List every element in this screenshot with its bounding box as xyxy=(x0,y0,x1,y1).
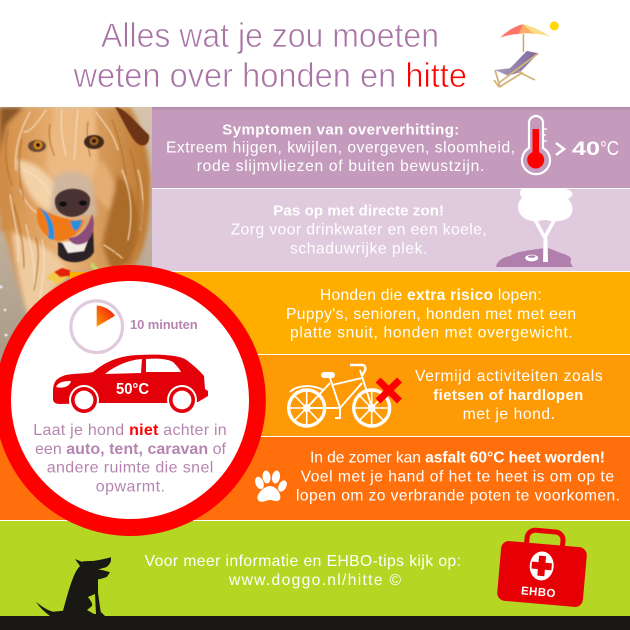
sun warning text xyxy=(231,203,487,257)
panel: direct sun xyxy=(152,189,630,271)
temperature above 40 degrees: 40 xyxy=(572,139,600,160)
collar xyxy=(46,268,70,284)
avoid activities text: fietsen of hardlopen xyxy=(433,387,583,404)
avoid activities text: Vermijd activiteiten zoals xyxy=(415,368,603,385)
temperature above 40 degrees xyxy=(556,138,619,160)
panel: footer xyxy=(0,521,630,630)
ten minutes label: 10 minuten xyxy=(130,317,198,332)
right ear xyxy=(115,107,149,145)
warning text xyxy=(33,422,227,496)
title xyxy=(73,17,467,95)
icon: car: 50°C xyxy=(116,381,149,398)
warning text: opwarmt. xyxy=(96,479,165,496)
icon: paw print xyxy=(254,470,289,502)
asphalt text: lopen om zo verbrande poten te voorkomen. xyxy=(296,488,620,505)
warning text: Laat je hond niet achter in xyxy=(33,422,227,439)
icon: first aid kit xyxy=(497,527,589,608)
footer text: Voor meer informatie en EHBO-tips kijk op: xyxy=(145,553,461,570)
mouth xyxy=(58,228,94,262)
symptoms text: Symptomen van oververhitting: xyxy=(222,121,459,138)
warning text: andere ruimte die snel xyxy=(47,460,213,477)
panel: avoid activities xyxy=(0,355,630,436)
icon: bicycle with red cross xyxy=(289,365,400,426)
panel: hot asphalt xyxy=(0,437,630,520)
icon: tree with water bowl xyxy=(496,189,573,267)
nose xyxy=(55,189,90,217)
avoid activities text: met je hond. xyxy=(463,406,555,423)
fur strands xyxy=(6,110,143,298)
panel: symptoms xyxy=(152,107,630,188)
eyes xyxy=(28,140,46,152)
photo: golden retriever with ball xyxy=(0,107,152,363)
temperature above 40 degrees: °C xyxy=(600,138,619,160)
callout: never leave dog behind xyxy=(0,265,266,536)
icon: car xyxy=(53,355,208,415)
title: Alles wat je zou moeten xyxy=(101,17,439,55)
icon: first aid kit: EHBO xyxy=(520,585,556,600)
title: weten over honden en hitte xyxy=(73,57,467,95)
asphalt text: In de zomer kan asfalt 60°C heet worden! xyxy=(310,450,605,467)
icon: beach chair with parasol and sun xyxy=(494,22,559,87)
avoid activities text xyxy=(415,368,603,423)
icon: dog silhouette xyxy=(36,557,111,616)
extra risk text: platte snuit, honden met overgewicht. xyxy=(290,325,573,342)
panel: extra risk xyxy=(0,272,630,354)
symptoms text: Extreem hijgen, kwijlen, overgeven, sloomheid, xyxy=(166,140,515,157)
extra risk text: Honden die extra risico lopen: xyxy=(320,287,542,304)
extra risk text xyxy=(286,287,576,342)
footer text: www.doggo.nl/hitte © xyxy=(228,572,402,589)
sun warning text: schaduwrijke plek. xyxy=(290,240,427,257)
sun warning text: Zorg voor drinkwater en een koele, xyxy=(231,221,487,238)
icon: ten minute clock xyxy=(71,301,122,353)
sun warning text: Pas op met directe zon! xyxy=(273,203,444,220)
symptoms text: rode slijmvliezen of buiten bewustzijn. xyxy=(197,158,484,175)
ball xyxy=(37,207,84,241)
extra risk text: Puppy's, senioren, honden met met een xyxy=(286,306,576,323)
symptoms text xyxy=(166,121,515,175)
footer text xyxy=(145,553,461,589)
sand specks xyxy=(0,286,2,288)
asphalt text xyxy=(296,450,620,505)
asphalt text: Voel met je hand of het te heet is om op te xyxy=(301,469,614,486)
warning text: een auto, tent, caravan of xyxy=(35,441,227,458)
icon: thermometer xyxy=(522,116,550,174)
